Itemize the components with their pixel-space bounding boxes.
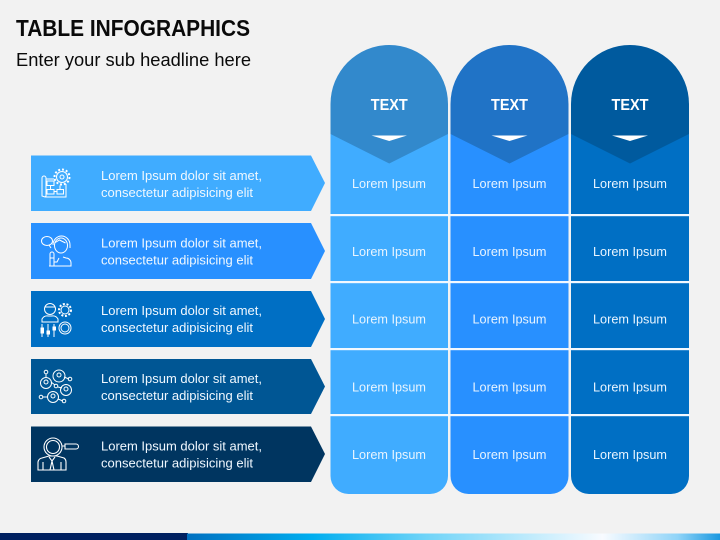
row 5 text: consectetur adipisicing elit xyxy=(101,456,254,470)
table cell labels: Lorem Ipsum xyxy=(352,380,426,394)
table cell labels: Lorem Ipsum xyxy=(352,312,426,326)
table cell labels: Lorem Ipsum xyxy=(593,177,667,191)
table cell labels xyxy=(352,177,667,462)
row 2 text: consectetur adipisicing elit xyxy=(101,254,254,268)
row 1 text: consectetur adipisicing elit xyxy=(101,186,254,200)
row 3 text: Lorem Ipsum dolor sit amet, xyxy=(101,304,262,318)
icon: magnifier over businessman xyxy=(38,438,78,470)
table cell labels: Lorem Ipsum xyxy=(472,245,546,259)
table cell labels: Lorem Ipsum xyxy=(352,448,426,462)
table cell labels: Lorem Ipsum xyxy=(472,448,546,462)
icon: blueprint and gear xyxy=(42,170,70,197)
table cell labels: Lorem Ipsum xyxy=(472,380,546,394)
column 1 body xyxy=(330,134,448,494)
table cell labels: Lorem Ipsum xyxy=(593,312,667,326)
column 3 header label: TEXT xyxy=(612,97,649,114)
column 1 xyxy=(330,45,448,494)
footer bar xyxy=(0,533,720,540)
row arrow 5 xyxy=(31,426,325,482)
column 2 header xyxy=(450,45,568,164)
row 4 text: Lorem Ipsum dolor sit amet, xyxy=(101,372,262,386)
column 1 header label: TEXT xyxy=(371,97,408,114)
row 4 text: consectetur adipisicing elit xyxy=(101,389,254,403)
column 3 header xyxy=(571,45,689,164)
table cell labels: Lorem Ipsum xyxy=(352,177,426,191)
row 5 text: Lorem Ipsum dolor sit amet, xyxy=(101,440,262,454)
row 1 text: Lorem Ipsum dolor sit amet, xyxy=(101,169,262,183)
icon: manager, gear, sliders, coin xyxy=(41,304,71,337)
column 3 marker xyxy=(612,136,648,141)
row arrow 4 xyxy=(31,359,325,414)
table cell labels: Lorem Ipsum xyxy=(472,177,546,191)
column 2 xyxy=(450,45,568,494)
table cell labels: Lorem Ipsum xyxy=(593,245,667,259)
row 3 text: consectetur adipisicing elit xyxy=(101,321,254,335)
row arrow 3 xyxy=(31,291,325,347)
row arrow 1 xyxy=(31,156,325,211)
column 1 marker xyxy=(372,136,407,141)
icon: people network xyxy=(39,370,72,403)
column 2 header label: TEXT xyxy=(491,97,528,114)
column 2 marker xyxy=(492,136,528,141)
row 2 text: Lorem Ipsum dolor sit amet, xyxy=(101,236,262,250)
row arrow 2 xyxy=(31,223,325,279)
table cell labels: Lorem Ipsum xyxy=(593,448,667,462)
icon: support agent xyxy=(42,236,71,266)
table cell labels: Lorem Ipsum xyxy=(593,380,667,394)
table cell labels: Lorem Ipsum xyxy=(352,245,426,259)
column 2 body xyxy=(450,134,568,494)
column 3 body xyxy=(571,134,689,494)
subtitle: Enter your sub headline here xyxy=(16,50,251,70)
table cell labels: Lorem Ipsum xyxy=(472,312,546,326)
column 1 header xyxy=(330,45,448,164)
title: TABLE INFOGRAPHICS xyxy=(16,15,250,41)
column 3 xyxy=(571,45,689,494)
